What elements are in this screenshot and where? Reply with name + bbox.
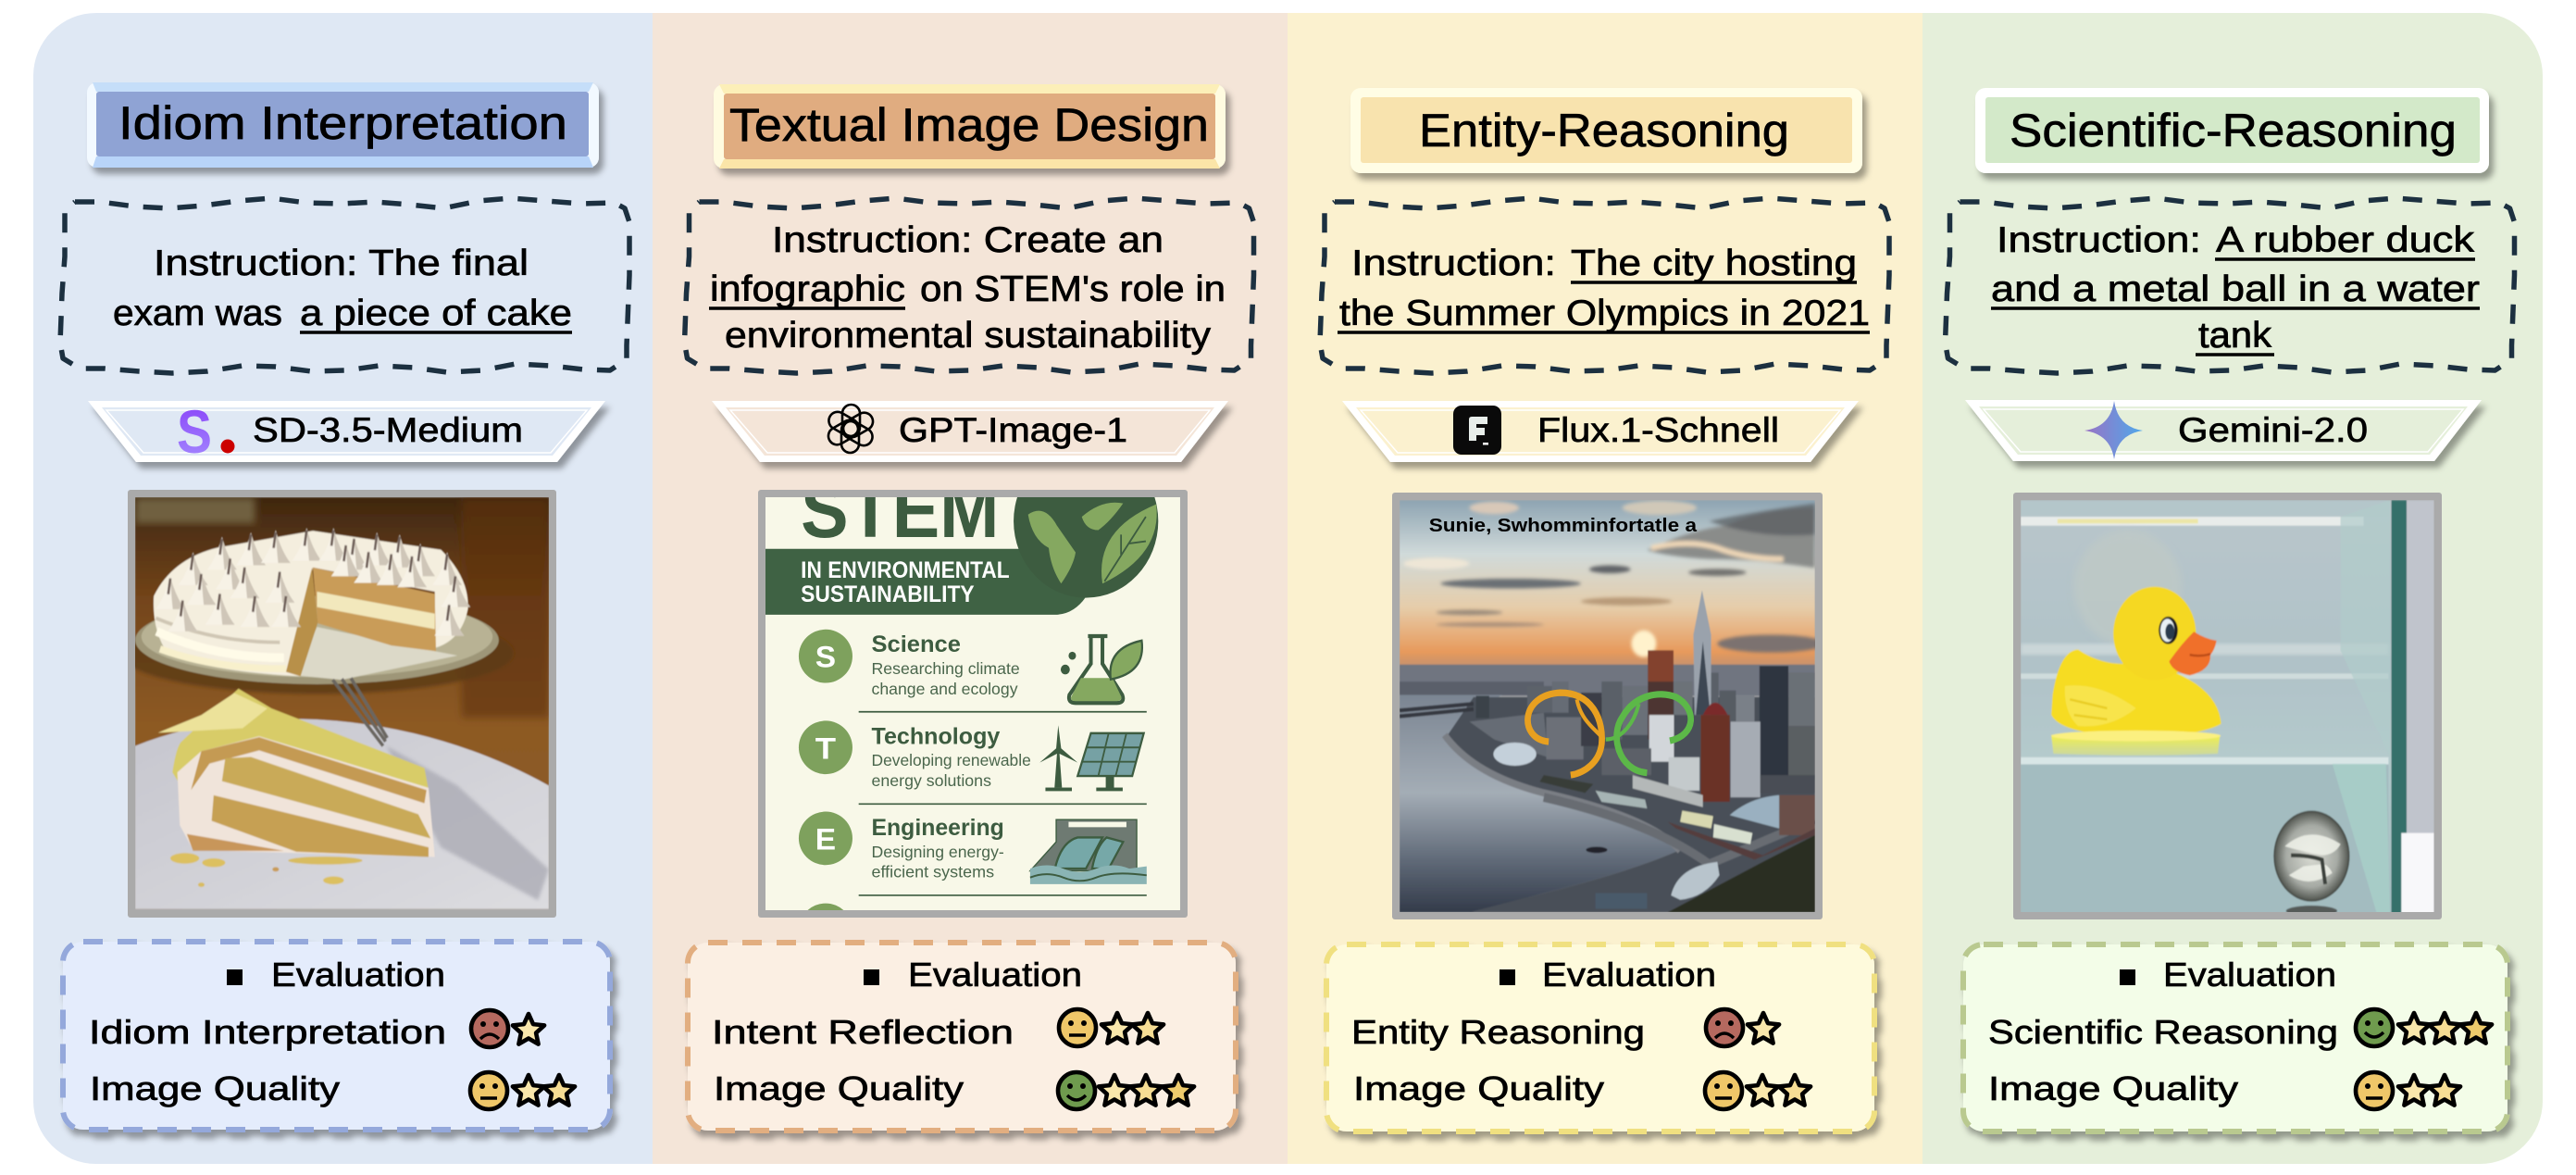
evaluation card: Idiom Interpretation — [89, 1013, 446, 1051]
generated image: stem infographic: Researching climate — [872, 658, 1020, 678]
instruction box — [685, 198, 1253, 373]
instruction box — [60, 198, 629, 373]
model ribbon — [88, 397, 605, 466]
evaluation card: Image Quality — [90, 1069, 340, 1107]
evaluation card: Scientific Reasoning — [1988, 1013, 2338, 1051]
generated image: stem infographic: Developing renewable — [872, 750, 1031, 769]
rating: image quality — [2356, 1072, 2460, 1109]
bullet square — [227, 969, 243, 985]
model ribbon: Flux.1-Schnell — [1537, 411, 1779, 449]
evaluation card: Image Quality — [1353, 1069, 1604, 1107]
generated image: stem infographic: SUSTAINABILITY — [801, 581, 975, 607]
generated image: cake — [120, 497, 549, 909]
icon: openai logo — [825, 405, 877, 453]
generated image: stem infographic: efficient systems — [872, 862, 994, 881]
rating: scientific reasoning — [2356, 1009, 2492, 1046]
generated image: stem infographic: Technology — [872, 724, 1001, 750]
heading: Entity-Reasoning — [1419, 105, 1789, 156]
evaluation card: Evaluation — [1542, 956, 1716, 994]
generated image: stem infographic: Designing energy- — [872, 842, 1004, 861]
panel background — [653, 13, 1288, 1164]
instruction box: Instruction: The final — [154, 244, 529, 283]
evaluation card — [1963, 944, 2508, 1131]
panel: textual image design — [653, 13, 1288, 1164]
generated image: stem infographic: T — [815, 731, 836, 766]
image frame: cake — [128, 490, 556, 918]
generated image: city — [1400, 500, 1824, 912]
evaluation card: Entity Reasoning — [1351, 1013, 1645, 1051]
panel: entity reasoning — [1288, 13, 1923, 1164]
generated image: stem infographic: Engineering — [872, 815, 1004, 841]
generated image: duck — [2021, 500, 2434, 917]
model ribbon: GPT-Image-1 — [899, 411, 1127, 449]
panel: idiom interpretation — [33, 13, 653, 1164]
icon: gemini star — [2084, 401, 2143, 459]
rating: idiom interpretation — [471, 1010, 544, 1047]
generated image: stem infographic: change and ecology — [872, 679, 1018, 698]
instruction box: Instruction: Create an — [772, 220, 1164, 260]
instruction box: a piece of cake — [300, 294, 572, 333]
instruction box: Instruction: — [1351, 244, 1556, 283]
generated image: stem infographic — [765, 497, 1180, 910]
instruction box: tank — [2198, 316, 2272, 356]
model ribbon — [1342, 401, 1859, 462]
generated image: city: Sunie, Swhomminfortatle a — [1429, 515, 1698, 536]
heading — [1975, 88, 2489, 173]
instruction box: exam was — [113, 294, 282, 333]
evaluation card: Image Quality — [714, 1069, 964, 1107]
generated image: stem infographic: STEM — [801, 467, 999, 554]
heading: Idiom Interpretation — [118, 97, 567, 149]
instruction box: the Summer Olympics in 2021 — [1339, 294, 1870, 333]
rating: image quality — [1705, 1072, 1811, 1109]
image frame: stem infographic — [758, 490, 1188, 918]
bullet square — [2120, 969, 2135, 985]
instruction box — [1946, 198, 2514, 373]
instruction box: and a metal ball in a water — [1991, 269, 2480, 309]
evaluation card: Evaluation — [2163, 956, 2336, 994]
instruction box: on STEM's role in — [920, 269, 1226, 309]
generated image: stem infographic: Science — [872, 631, 961, 657]
panel background — [1288, 13, 1923, 1164]
heading — [1350, 88, 1862, 173]
panel: scientific reasoning — [1923, 13, 2543, 1164]
rating: intent reflection — [1059, 1009, 1164, 1046]
instruction box: Instruction: — [1997, 220, 2201, 260]
generated image: stem infographic: E — [815, 821, 836, 856]
instruction box: infographic — [710, 269, 905, 309]
evaluation card: Intent Reflection — [712, 1013, 1014, 1051]
instruction box: environmental sustainability — [725, 316, 1212, 356]
rating: entity reasoning — [1706, 1009, 1779, 1046]
heading: Scientific-Reasoning — [2010, 105, 2457, 156]
model ribbon — [712, 401, 1228, 462]
evaluation card — [688, 943, 1236, 1131]
evaluation card: Evaluation — [271, 956, 445, 994]
bullet square — [1500, 969, 1515, 985]
rating: image quality — [1058, 1072, 1194, 1109]
generated image: stem infographic: S — [815, 640, 836, 674]
image frame: city — [1392, 493, 1823, 919]
heading — [87, 82, 599, 168]
bullet square — [864, 969, 879, 985]
instruction box — [1320, 198, 1889, 373]
model ribbon — [1965, 400, 2482, 461]
generated image: stem infographic: energy solutions — [872, 771, 991, 790]
panel background — [1923, 13, 2543, 1164]
evaluation card — [63, 942, 610, 1130]
icon: flux logo — [1453, 406, 1501, 455]
model ribbon: Gemini-2.0 — [2178, 411, 2368, 449]
instruction box: The city hosting — [1571, 244, 1857, 283]
rating: image quality — [470, 1072, 575, 1109]
evaluation card: Image Quality — [1988, 1069, 2238, 1107]
icon: stability logo: S — [177, 397, 212, 466]
heading: Textual Image Design — [729, 99, 1209, 151]
evaluation card: Evaluation — [908, 956, 1082, 994]
generated image: stem infographic: IN ENVIRONMENTAL — [801, 557, 1010, 583]
heading — [714, 84, 1226, 169]
panel background — [33, 13, 653, 1164]
instruction box: A rubber duck — [2216, 220, 2475, 260]
model ribbon: SD-3.5-Medium — [253, 411, 523, 449]
evaluation card — [1326, 944, 1874, 1131]
image frame: duck — [2013, 493, 2442, 919]
